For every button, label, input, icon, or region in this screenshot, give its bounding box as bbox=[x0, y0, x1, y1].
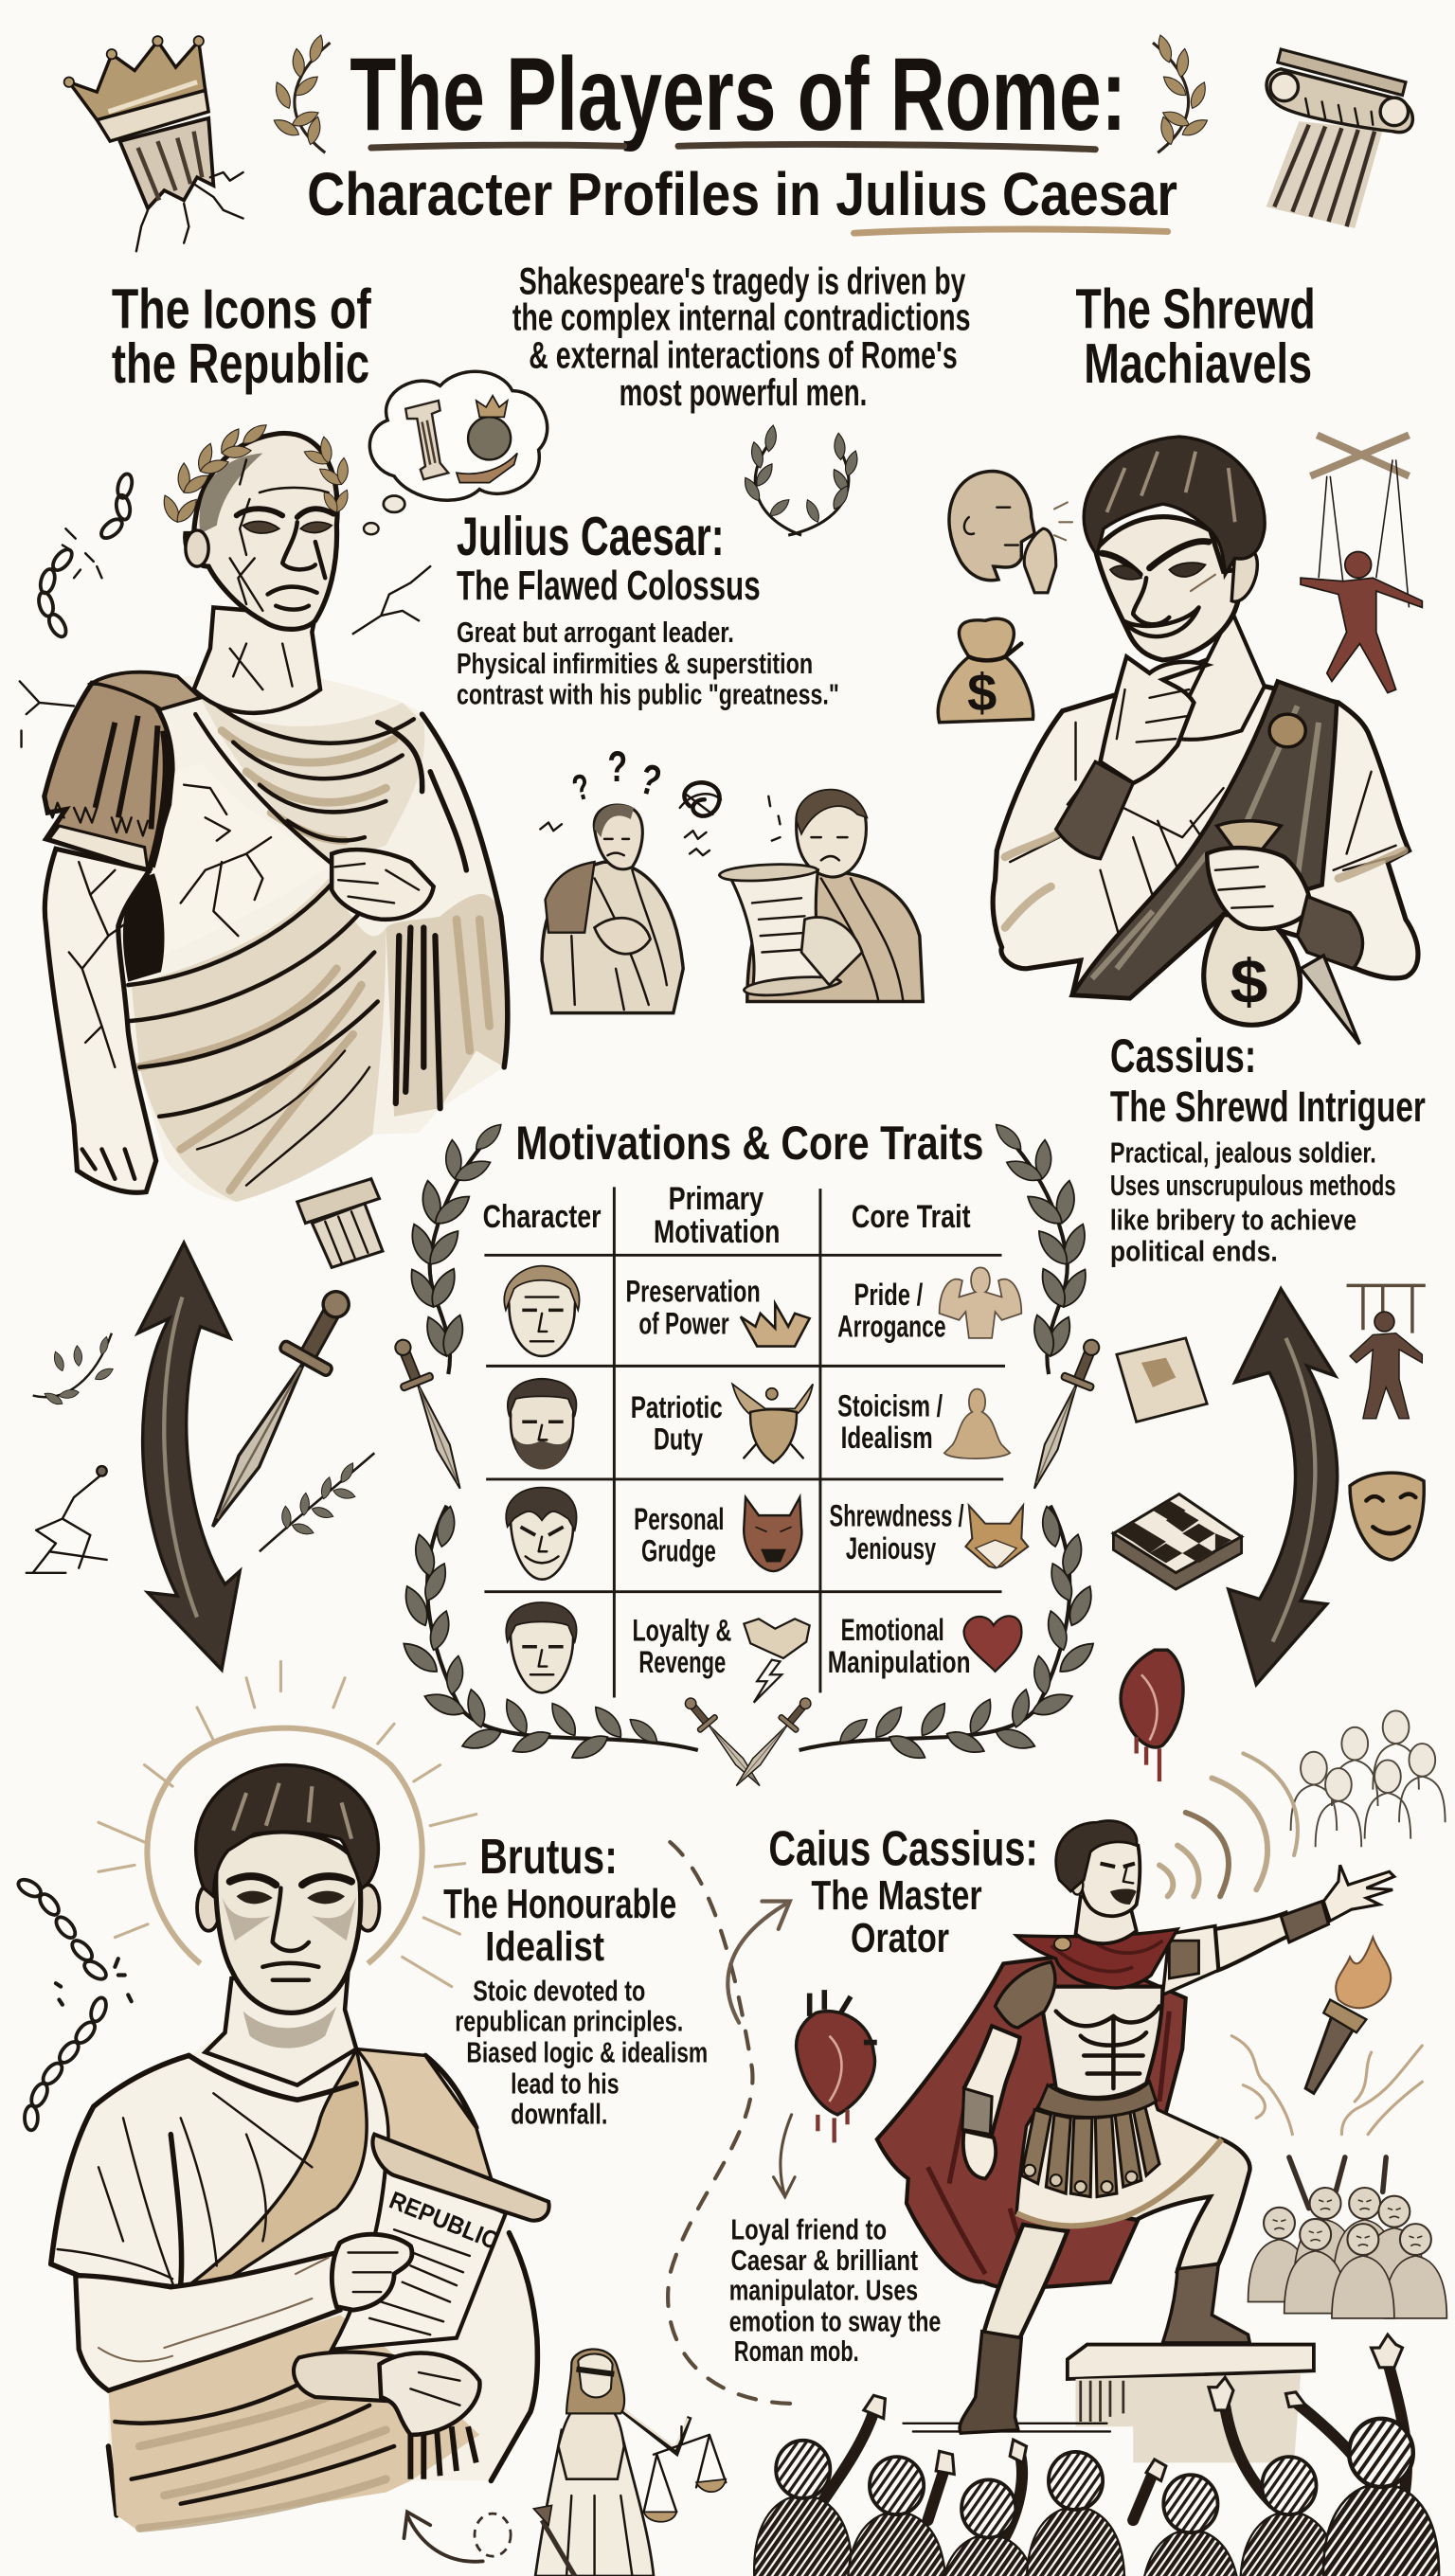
subtitle underline bbox=[853, 229, 1168, 233]
text: patriotic duty: Patriotic bbox=[631, 1390, 723, 1424]
icon: laurel right of title bbox=[1153, 33, 1210, 152]
muscled cuirass bbox=[1039, 1987, 1162, 2098]
caesar toga silhouette bbox=[118, 675, 508, 1202]
text: shrewdness jealousy: Shrewdness / bbox=[829, 1499, 964, 1533]
text: antony description: Caesar & brilliant bbox=[730, 2245, 918, 2277]
description: lead to his bbox=[511, 2068, 620, 2100]
tunic folds bbox=[1010, 723, 1404, 985]
caesar right outline bbox=[378, 714, 508, 1067]
icon: crown bbox=[741, 1303, 810, 1347]
icon: money sack: $ bbox=[967, 664, 997, 723]
icon: meditating figure bbox=[944, 1389, 1010, 1458]
robe folds bbox=[115, 2356, 476, 2529]
face: caesar bbox=[504, 1266, 580, 1356]
description: republican principles. bbox=[455, 2006, 683, 2037]
dagger left bbox=[385, 1334, 476, 1494]
neck bbox=[1169, 611, 1265, 740]
caesar mantle folds bbox=[46, 672, 201, 870]
icon: money sack bbox=[938, 618, 1033, 723]
laurel frame left lower bbox=[399, 1505, 698, 1764]
caesar lower drape wash bbox=[132, 878, 386, 1202]
heading: the shrewd machiavels: Machiavels bbox=[1084, 333, 1312, 395]
epithet: Orator bbox=[851, 1916, 949, 1961]
icon: torch bbox=[1305, 1938, 1391, 2093]
description bbox=[457, 617, 839, 711]
icon: small laurel left bbox=[33, 1333, 115, 1407]
caesar drape dark streaks bbox=[396, 920, 490, 1108]
text: shrewdness jealousy bbox=[829, 1499, 964, 1565]
text: antony description bbox=[729, 2215, 941, 2368]
money sign: $ bbox=[1230, 946, 1267, 1016]
icon: ailing caesar with confusion marks: ? bbox=[607, 742, 627, 791]
arrow: curved arrow bottom left bbox=[404, 2512, 511, 2562]
icon: ailing caesar with confusion marks: ? bbox=[635, 754, 666, 806]
caesar arm cracks bbox=[69, 862, 132, 1067]
laurel frame right lower bbox=[799, 1505, 1099, 1764]
nose and mouth bbox=[262, 1888, 318, 1980]
heading: the shrewd machiavels bbox=[1076, 279, 1316, 395]
scroll writing lines bbox=[369, 2229, 470, 2334]
icon: bleeding heart lower bbox=[797, 1990, 877, 2142]
text: antony description: Loyal friend to bbox=[730, 2215, 887, 2246]
epithet: The Master bbox=[811, 1873, 982, 1919]
caesar head bbox=[186, 433, 337, 629]
description: Biased logic & idealism bbox=[466, 2037, 708, 2068]
header row: Motivation bbox=[654, 1214, 780, 1250]
icon: devil mask bbox=[744, 1497, 801, 1571]
neck shade bbox=[243, 2006, 336, 2048]
text: personal grudge: Personal bbox=[634, 1502, 725, 1536]
arrow: right double curved arrow bbox=[1229, 1289, 1338, 1685]
caesar shoulder mantle bbox=[45, 683, 172, 870]
figure: brutus bbox=[51, 1661, 549, 2531]
epithet bbox=[443, 1882, 676, 1970]
icon: crown on broken column bbox=[64, 36, 243, 251]
extended arm bbox=[1215, 1913, 1289, 1970]
icon: handshake bbox=[744, 1619, 810, 1658]
figure: mark antony orating bbox=[877, 1820, 1394, 2433]
text: pride arrogance: Pride / bbox=[853, 1278, 923, 1312]
text: brutus profile bbox=[443, 1830, 708, 2131]
text: patriotic duty: Duty bbox=[654, 1422, 703, 1456]
halo bbox=[147, 1728, 422, 1963]
icon: small toppled column bbox=[297, 1179, 383, 1267]
caesar bare arm bbox=[45, 849, 156, 1192]
name: Brutus: bbox=[479, 1830, 618, 1885]
lower robe tan bbox=[108, 2315, 479, 2531]
head bbox=[1095, 517, 1248, 660]
neck bbox=[1076, 1896, 1137, 1943]
skirt bbox=[1016, 2085, 1222, 2226]
icon: theatre mask bbox=[1350, 1473, 1424, 1560]
abdominal lines bbox=[1056, 2006, 1159, 2088]
sash highlight bbox=[1092, 706, 1319, 978]
face: antony bbox=[506, 1602, 577, 1692]
dagger bbox=[1301, 956, 1359, 1045]
arrow: dashed curved path between brutus and antony bbox=[668, 1842, 801, 2404]
intro text block bbox=[512, 260, 971, 414]
row: brutus bbox=[508, 1379, 1010, 1470]
hand on bag bbox=[1207, 848, 1310, 929]
icon: marionette bbox=[1301, 435, 1422, 693]
heading: the icons of the republic: the Republic bbox=[112, 333, 369, 395]
text: patriotic duty bbox=[631, 1390, 723, 1456]
ear bbox=[1071, 1875, 1083, 1895]
text: stoicism idealism bbox=[837, 1388, 943, 1455]
text: stoicism idealism: Stoicism / bbox=[837, 1388, 943, 1422]
head bbox=[216, 1832, 361, 2012]
shoulder armour right bbox=[1169, 1941, 1199, 1978]
text: preservation of power: of Power bbox=[638, 1306, 729, 1340]
head bbox=[1081, 1841, 1140, 1916]
description: Practical, jealous soldier. bbox=[1110, 1137, 1376, 1169]
panel: motivations and core traits table bbox=[385, 1116, 1110, 1794]
description: Stoic devoted to bbox=[473, 1976, 645, 2007]
icon: large dagger bbox=[189, 1279, 367, 1540]
face features bbox=[1101, 1864, 1137, 1905]
sly face bbox=[1102, 542, 1215, 636]
pteruges strips bbox=[1021, 2104, 1159, 2197]
icon: falling figure sketch bbox=[27, 1466, 107, 1573]
ear bbox=[1231, 547, 1257, 601]
shoulder armour left bbox=[996, 1962, 1055, 2028]
forearm bbox=[76, 2252, 340, 2390]
wrist guard bbox=[1281, 1901, 1329, 1942]
header row: Primary bbox=[669, 1181, 764, 1217]
description: like bribery to achieve bbox=[1110, 1205, 1356, 1236]
text: shrewdness jealousy: Jeniousy bbox=[846, 1531, 936, 1565]
illustration: lady justice bbox=[533, 2349, 726, 2576]
text: loyalty and revenge bbox=[632, 1614, 731, 1679]
left bracer bbox=[962, 2088, 992, 2135]
intro text block: the complex internal contradictions bbox=[512, 296, 971, 338]
caesar drape fold lines bbox=[128, 878, 378, 1190]
arrow: left double curved arrow bbox=[138, 1243, 240, 1670]
icon: cracks near caesar bbox=[20, 566, 430, 747]
text: personal grudge: Grudge bbox=[641, 1534, 716, 1568]
tunic body bbox=[51, 2032, 537, 2531]
lower hand bbox=[379, 2352, 479, 2435]
description: political ends. bbox=[1110, 1236, 1278, 1267]
main title text: The Players of Rome: bbox=[350, 37, 1126, 152]
heading: the icons of the republic bbox=[112, 279, 371, 395]
hair bbox=[1084, 437, 1265, 575]
front boot bbox=[1162, 2264, 1249, 2343]
caesar shadow under sleeve bbox=[123, 873, 165, 982]
right shoulder drape bbox=[356, 2049, 493, 2184]
back leg bbox=[983, 2225, 1068, 2338]
lower hand lines bbox=[410, 2372, 459, 2406]
icon: eagle shield bbox=[732, 1384, 813, 1463]
face: cassius bbox=[506, 1488, 577, 1580]
name: Julius Caesar: bbox=[457, 507, 725, 567]
illustration: faded crowd upper right bbox=[1291, 1710, 1446, 1847]
heading: the shrewd machiavels: The Shrewd bbox=[1076, 279, 1316, 341]
red scarf bbox=[1016, 1929, 1177, 1988]
caesar laurel crown bbox=[160, 420, 351, 526]
description: Great but arrogant leader. bbox=[457, 617, 734, 649]
arrow: curved arrow up to antony title bbox=[728, 1901, 790, 2023]
hand on chin bbox=[1101, 656, 1207, 783]
title underline bbox=[371, 144, 1095, 150]
scroll title: REPUBLIC bbox=[386, 2186, 503, 2255]
caesar neck bbox=[194, 607, 320, 713]
icon: sound arcs bbox=[1159, 1753, 1298, 1896]
crossed daggers bbox=[678, 1691, 817, 1794]
sash tan bbox=[189, 2049, 367, 2294]
bag neck bbox=[1217, 821, 1281, 850]
fist bbox=[332, 2234, 412, 2310]
tunic body bbox=[993, 660, 1418, 998]
text: emotional manipulation: Manipulation bbox=[828, 1645, 971, 1679]
face: brutus bbox=[508, 1379, 576, 1470]
curly hair bbox=[1056, 1820, 1137, 1891]
icon: anxious servant with scroll bbox=[719, 790, 923, 1001]
icon: ailing caesar with confusion marks bbox=[540, 742, 721, 1013]
dark sash bbox=[1072, 681, 1337, 998]
intro text block: & external interactions of Rome's bbox=[529, 334, 958, 376]
text: antony description: emotion to sway the bbox=[729, 2307, 941, 2338]
icon: lightning bbox=[754, 1660, 781, 1703]
figure: machiavel cassius bbox=[993, 437, 1418, 1045]
cape bbox=[877, 1954, 1186, 2289]
figure: julius caesar bbox=[45, 420, 508, 1202]
icon: bleeding heart upper bbox=[1121, 1650, 1183, 1781]
description: contrast with his public "greatness." bbox=[457, 680, 839, 711]
caesar sash folds bbox=[195, 703, 414, 864]
brooch bbox=[1269, 714, 1305, 747]
description: Physical infirmities & superstition bbox=[457, 649, 813, 680]
cape folds bbox=[928, 2012, 1169, 2282]
text: loyalty and revenge: Revenge bbox=[638, 1645, 726, 1679]
illustration: angry crowd right bbox=[1248, 2157, 1446, 2318]
back boot bbox=[960, 2332, 1021, 2433]
caesar cracks and armour details bbox=[181, 785, 271, 936]
fist finger lines bbox=[349, 2252, 398, 2292]
header row: Character bbox=[483, 1199, 602, 1235]
heading: the icons of the republic: The Icons of bbox=[112, 279, 371, 341]
hair highlights bbox=[1106, 452, 1235, 522]
front leg bbox=[1117, 2139, 1249, 2271]
shoulder clasp bbox=[1054, 1938, 1070, 1951]
tunic outlines bbox=[51, 2055, 537, 2515]
text: personal grudge bbox=[634, 1502, 725, 1568]
text: emotional manipulation: Emotional bbox=[841, 1613, 944, 1647]
scroll lower roller bbox=[294, 2352, 428, 2402]
laurel frame left upper bbox=[404, 1119, 506, 1374]
text: pride arrogance: Arrogance bbox=[837, 1310, 946, 1344]
icon: second marionette bbox=[1347, 1285, 1426, 1419]
icon: thought bubble bbox=[364, 371, 548, 534]
icon: ionic column bbox=[1266, 49, 1412, 228]
icon: chessboard bbox=[1113, 1494, 1242, 1589]
header row: Core Trait bbox=[852, 1199, 971, 1235]
icon: broken chain left bbox=[36, 473, 135, 639]
name: Cassius: bbox=[1110, 1029, 1256, 1082]
row: cassius bbox=[506, 1488, 1028, 1580]
name: Caius Cassius: bbox=[768, 1821, 1038, 1876]
caesar face bbox=[230, 459, 333, 611]
text: pride arrogance bbox=[837, 1278, 946, 1344]
description bbox=[1110, 1137, 1396, 1267]
arm sketch lines bbox=[99, 2258, 329, 2361]
icon: fox head bbox=[965, 1506, 1028, 1568]
epithet: The Honourable bbox=[443, 1882, 676, 1927]
text: antony description: manipulator. Uses bbox=[729, 2276, 918, 2307]
collar bbox=[189, 2055, 356, 2100]
wrist bracer left bbox=[1056, 761, 1133, 859]
text: emotional manipulation bbox=[828, 1613, 971, 1679]
intro text block: most powerful men. bbox=[620, 372, 867, 414]
halo rays bbox=[99, 1661, 476, 1987]
laurel frame right upper bbox=[991, 1119, 1092, 1374]
icon: broken chain lower left bbox=[15, 1876, 132, 2130]
intro text block: Shakespeare's tragedy is driven by bbox=[519, 260, 965, 302]
arrow: heart to description bbox=[774, 2115, 795, 2197]
icon: map scroll bbox=[1117, 1338, 1207, 1422]
hair highlights bbox=[233, 1783, 351, 1839]
hair bbox=[196, 1765, 378, 1896]
text: stoicism idealism: Idealism bbox=[841, 1421, 933, 1455]
title bbox=[307, 37, 1177, 233]
text: loyalty and revenge: Loyalty & bbox=[632, 1614, 731, 1648]
text: preservation of power bbox=[626, 1275, 761, 1340]
description: downfall. bbox=[511, 2100, 607, 2131]
icon: whispering head bbox=[949, 472, 1072, 593]
row: caesar bbox=[504, 1266, 1021, 1356]
row: antony bbox=[506, 1602, 1021, 1703]
neck bbox=[206, 1970, 356, 2085]
text: julius caesar profile bbox=[457, 507, 839, 711]
epithet: Idealist bbox=[485, 1924, 604, 1970]
brow and eyes bbox=[222, 1876, 356, 1941]
icon: central laurel wreath bbox=[741, 424, 860, 535]
skirt hem bbox=[1016, 2139, 1222, 2226]
table title: Motivations & Core Traits bbox=[515, 1116, 983, 1170]
icon: flexing torso bbox=[940, 1267, 1021, 1338]
caesar upper sash bbox=[201, 698, 424, 864]
wrist bracer right bbox=[1298, 897, 1363, 969]
text: cassius profile bbox=[1110, 1029, 1426, 1267]
left arm lowered bbox=[964, 2026, 1020, 2135]
icon: plinth bbox=[903, 2345, 1314, 2462]
belt bbox=[1038, 2082, 1156, 2118]
illustration: roman mob raised hands bbox=[754, 2334, 1439, 2576]
table grid bbox=[484, 1187, 1005, 1698]
epithet: The Flawed Colossus bbox=[457, 564, 761, 609]
icon: smoke wisps bbox=[1231, 2036, 1422, 2135]
chest folds bbox=[58, 2093, 312, 2287]
left fist bbox=[963, 2131, 996, 2178]
text: antony description: Roman mob. bbox=[734, 2336, 859, 2368]
scroll top roller bbox=[372, 2135, 549, 2221]
icon: laurel left of title bbox=[271, 33, 330, 152]
caesar hair and ear bbox=[199, 453, 262, 533]
text: antony profile bbox=[768, 1821, 1038, 1961]
ears bbox=[197, 1885, 379, 1931]
text: preservation of power: Preservation bbox=[626, 1275, 761, 1309]
caesar right hanging drape bbox=[386, 894, 508, 1117]
dagger right bbox=[1019, 1334, 1110, 1494]
description bbox=[455, 1976, 708, 2131]
icon: wounded heart bbox=[964, 1616, 1021, 1672]
scarf folds bbox=[1051, 1941, 1162, 1972]
icon: ailing caesar with confusion marks: ? bbox=[568, 766, 595, 810]
icon: laurel branch bbox=[260, 1453, 374, 1551]
header row bbox=[483, 1181, 971, 1250]
epithet bbox=[811, 1873, 982, 1961]
open hand bbox=[1323, 1865, 1394, 1921]
caesar hand gripping toga bbox=[332, 850, 434, 920]
scroll page bbox=[332, 2162, 506, 2350]
sleeve right bbox=[1162, 1925, 1218, 1995]
money bag bbox=[1204, 915, 1300, 1025]
caesar chest plate bbox=[135, 763, 329, 960]
subtitle text: Character Profiles in Julius Caesar bbox=[307, 160, 1177, 228]
